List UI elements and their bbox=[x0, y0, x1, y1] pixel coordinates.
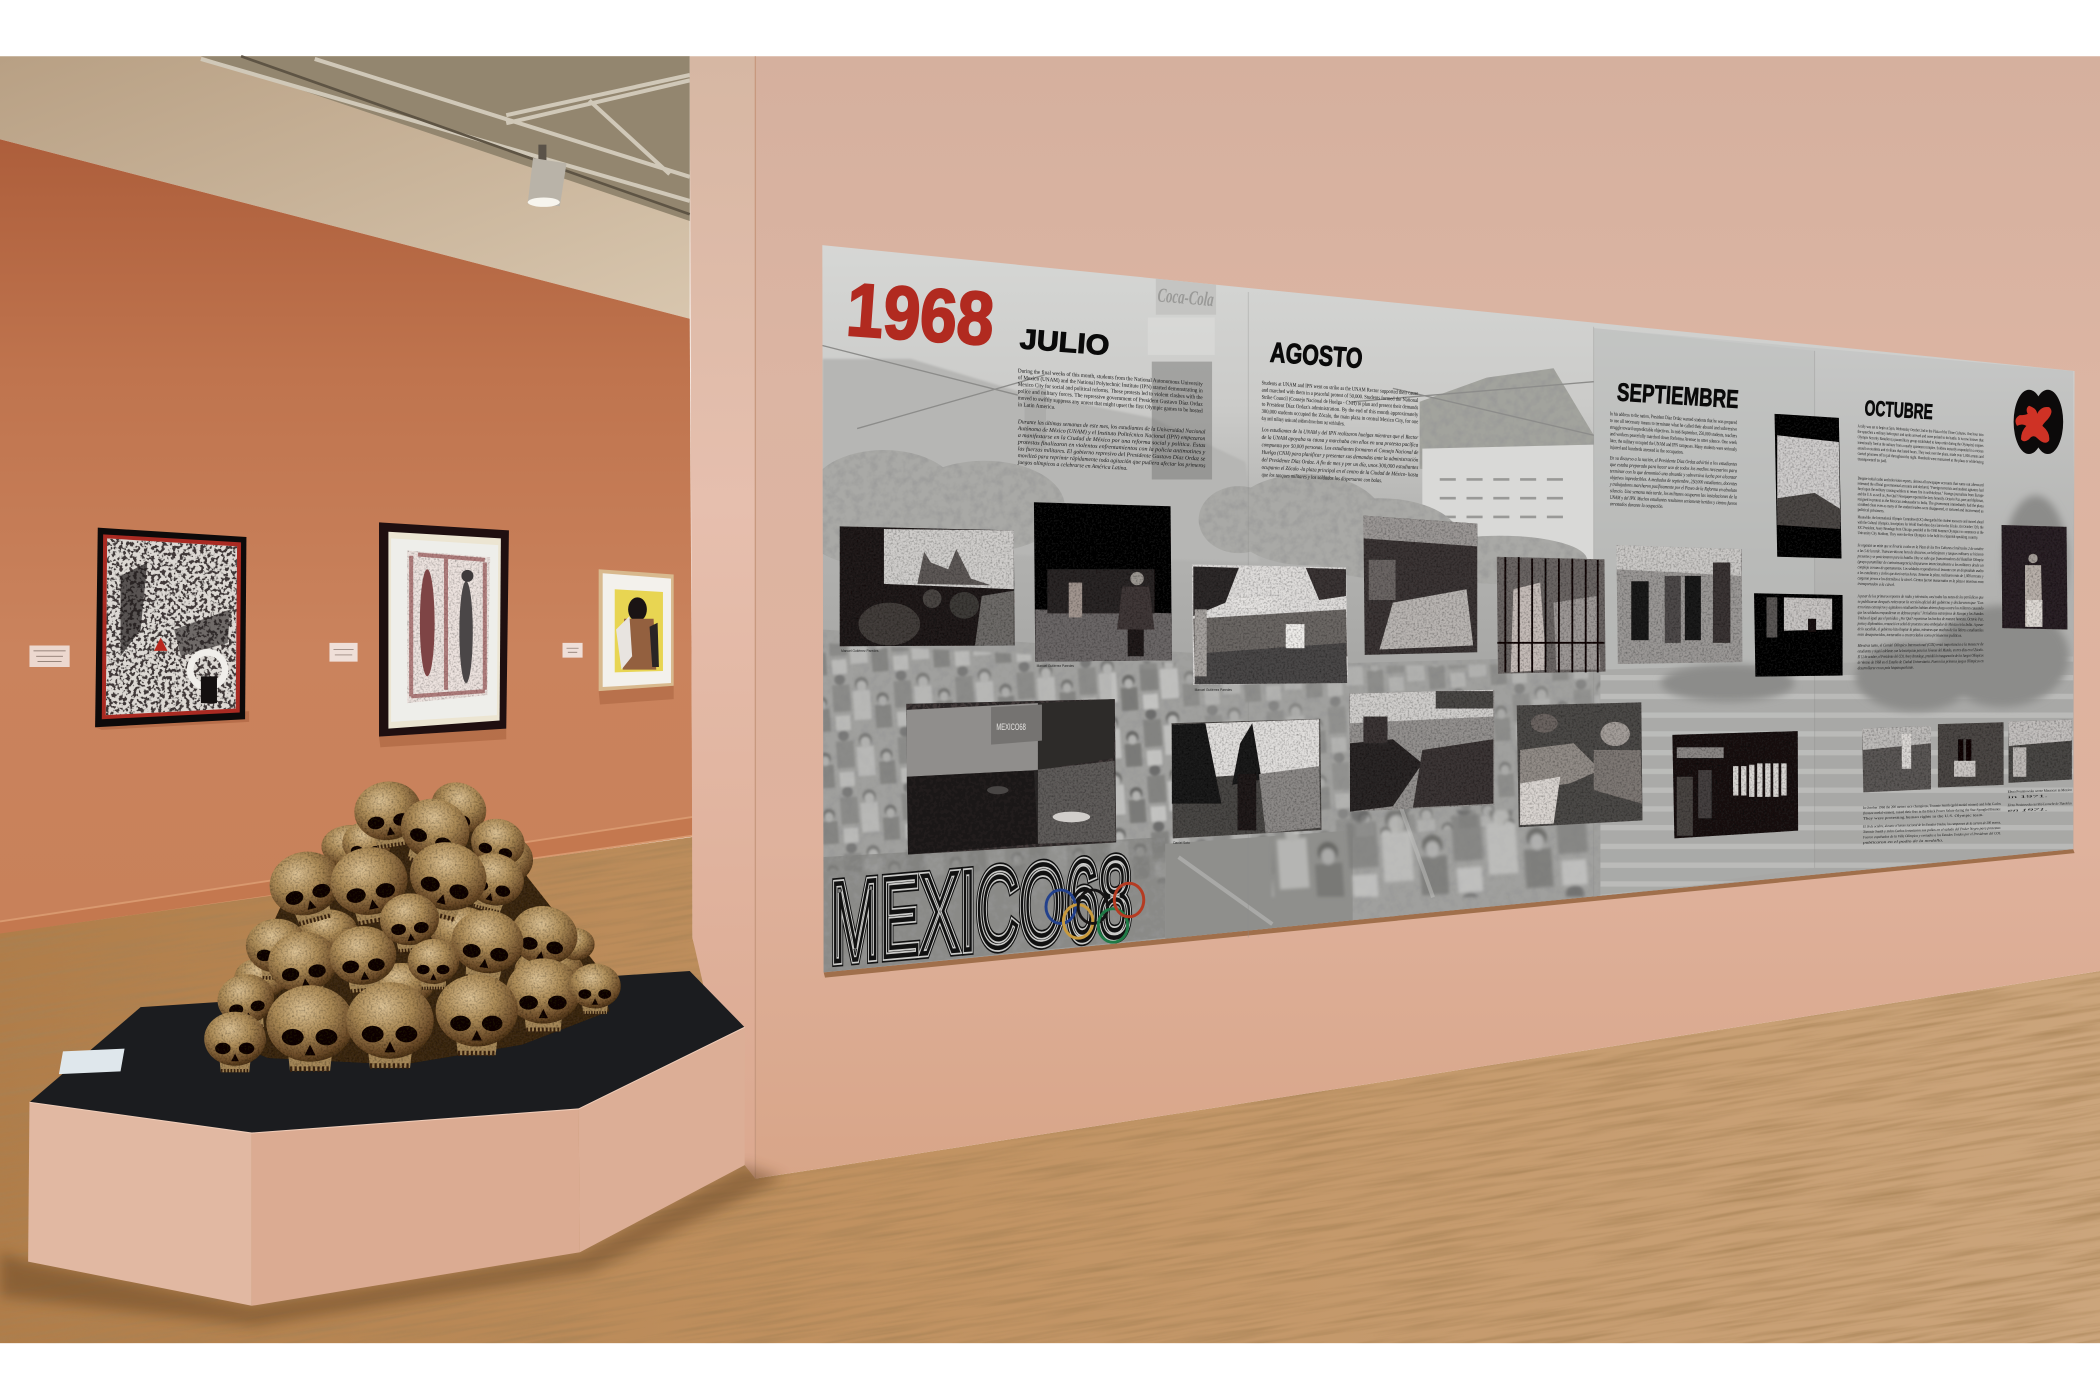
photo: flooded plaza bbox=[1171, 719, 1321, 838]
photo: group portrait bbox=[2009, 720, 2072, 783]
text block: September Spanish: UNAM y del IPN. Muchos estudiantes resultaron seriamente heridos y cientos fueron bbox=[1610, 494, 1737, 507]
text block: October Spanish rally: complejo cercano de apartamentos. Los soldados respondieron al instante con un despiadado asalto bbox=[1858, 564, 1983, 573]
skull pile sculpture bbox=[204, 772, 621, 1072]
heading: Octubre: OCTUBRE bbox=[1864, 396, 1934, 424]
photo: student march with signs bbox=[1192, 565, 1348, 685]
text block: August Spanish: Huelga (CNH) para planificar y presentar sus demandas ante la administración bbox=[1261, 449, 1418, 464]
photo captions: Manuel Gutiérrez Paredes bbox=[1195, 688, 1232, 692]
text block: October Spanish press: terroristas extranjeros y agitadores estudiantiles habían abierto fuego contra los militares causando bbox=[1858, 604, 1983, 611]
text block: August English: to President Díaz Ordaz's administration. By the end of this month approximately bbox=[1262, 401, 1418, 418]
photo captions: Manuel Gutiérrez Paredes bbox=[841, 649, 879, 653]
panel background bbox=[822, 245, 2075, 972]
text block: October English: A rally was set to begin at 5pm, Wednesday October 2nd in the Plaza of the Three Cultures. One hour into bbox=[1858, 423, 1983, 438]
text block: October Spanish Olympic committee: desarrollarse en un país hispanoparlante. bbox=[1858, 665, 1914, 670]
octagonal pedestal bbox=[28, 971, 745, 1306]
text block: October Olympic committee: University City Stadium. They were the first Olympics to be held in a Spanish speaking country. bbox=[1858, 530, 1978, 540]
photo: tank in Zocalo bbox=[1349, 690, 1494, 812]
text block: July Spanish: movilizó para reprimir rápidamente toda agitación que pudiera afectar los primeros bbox=[1018, 452, 1206, 469]
text block: October Spanish press: A pesar de los primeros reportes de radio y televisión, casi todas las notas de los periódicos que bbox=[1857, 593, 1984, 601]
track light fixture bbox=[528, 145, 567, 207]
text block: September English: struggle toward unpredictable objectives. In mid-September, 250,000 students, teachers bbox=[1610, 425, 1737, 439]
heading: Agosto: AGOSTO bbox=[1269, 337, 1364, 374]
bottom white band bbox=[0, 1343, 2100, 1400]
timeline panel bbox=[810, 245, 2075, 978]
text block: September English: In his address to the nation, President Díaz Ordaz warned students that he was prepared bbox=[1610, 411, 1737, 426]
text block: September English: later, the military occupied the UNAM and IPN campuses. Many students were seriously bbox=[1610, 438, 1737, 453]
back gallery wall bbox=[0, 139, 692, 921]
photo captions: Manuel Gutiérrez Paredes bbox=[1037, 664, 1074, 668]
pedestal label bbox=[59, 1049, 125, 1074]
ghost collage bbox=[810, 275, 2073, 972]
text block: Olympic caption right bbox=[2007, 788, 2072, 813]
panel seams bbox=[1248, 292, 1815, 938]
text block: October English bbox=[1858, 423, 1984, 470]
text block: October English: assault on students and civilians that lasted hours. They took over the plaza, made over 1,000 arrests and bbox=[1858, 445, 1984, 460]
text block: September Spanish: terminar con lo que denominó una absurda y subversiva lucha por alcanzar bbox=[1610, 469, 1738, 481]
text block: October Olympic committee: with the Cultural Olympics, Inscriptions for World Youth three days later in the Zócalo. On October 12th, the bbox=[1858, 520, 1984, 531]
photo: black power salute bbox=[1938, 722, 2004, 788]
text block: July English: moved to swiftly suppress any unrest that might upset the first Olympic games to be hosted bbox=[1018, 394, 1203, 415]
text block: October Spanish Olympic committee: estudiantes y siguió adelante con la Inscripción para los Jóvenes del Mundo, en tres días en el Zócalo. bbox=[1858, 647, 1983, 655]
icon: red and black 1968 emblem bbox=[2014, 390, 2063, 454]
photo: soldiers clashing bbox=[1517, 702, 1642, 827]
wall corner bbox=[754, 56, 756, 1179]
text block: Olympic caption right: Elena Poniatowska wrote Massacre in Mexico bbox=[2008, 788, 2072, 794]
text block: October English: transported to jail. bbox=[1858, 456, 1887, 463]
ghost sign text: Coca-Cola bbox=[1157, 284, 1215, 311]
text block: October Spanish Olympic committee bbox=[1857, 641, 1984, 670]
text block: August English bbox=[1262, 380, 1419, 433]
artwork: portrait on yellow bbox=[599, 569, 674, 704]
artwork: black and white print with red border bbox=[95, 528, 249, 730]
text block: August Spanish: Los estudiantes de la UNAM y del IPN realizaron huelgas mientras que el Rector bbox=[1261, 427, 1419, 441]
text block: July Spanish: Durante las últimas semanas de este mes, los estudiantes de la Universidad Nacional bbox=[1017, 419, 1206, 436]
photo: figure at dark window bbox=[1754, 593, 1843, 677]
text block: October press: scrubbed clean even as many of the student leaders were disappeared, or tortured and incarcerated as bbox=[1858, 502, 1984, 515]
text block: July English: During the final weeks of this month, students from the National Autonomous University bbox=[1018, 367, 1203, 388]
text block: August English: Strike Council (Consejo Nacional de Huelga - CNH) to plan and present their demands bbox=[1262, 394, 1418, 411]
text block: Olympic caption bbox=[1861, 802, 2001, 845]
text block: October Spanish rally: Se organizó un mitin que se llevaría a cabo en la Plaza de las Tres Culturas el miércoles 2 de octubre bbox=[1858, 542, 1984, 551]
text block: October press: Despite initial radio and television reports, almost all newspaper accounts that came out afterward bbox=[1858, 475, 1984, 488]
text block: Olympic caption: Fueron expulsados de la Villa Olímpica y enviados a los Estados Unidos por el Presidente del COI. bbox=[1862, 831, 2001, 839]
logo: Mexico 68 with Olympic rings bbox=[830, 833, 1144, 986]
heading: Julio: JULIO bbox=[1019, 323, 1111, 361]
photo: massive crowd with Mexico 68 building bbox=[906, 699, 1116, 854]
text block: Olympic caption right: en 1971. bbox=[2008, 807, 2048, 813]
text block: September English bbox=[1610, 411, 1738, 460]
olympic rings bbox=[1046, 883, 1144, 942]
wooden floor bbox=[0, 837, 2100, 1343]
ghost steps bbox=[1600, 656, 2073, 895]
text block: September English: injured and hundreds arrested in the occupation. bbox=[1610, 445, 1683, 456]
text block: August English: 300,000 students occupied the Zócalo, the main plaza in central Mexico City, for one bbox=[1262, 408, 1419, 425]
text block: October Spanish press: poeta y diplomático, renunció en señal de protesta como embajador de México en la India. A pesar bbox=[1857, 621, 1984, 628]
text block: September English: to use all necessary means to terminate what he called their absurd and subversive bbox=[1610, 418, 1738, 433]
text block: October press: and the U.S. as well as ¿Por Qué? Newspaper reported the facts honestly. Octavio Paz, poet and diplomat, bbox=[1858, 491, 1983, 504]
text block: October Spanish rally: a los estudiantes y civiles que duró varias horas. Tomaron la plaza, realizaron más de 1,000 arrestos y bbox=[1858, 570, 1984, 580]
photo: shirtless prisoner bbox=[2002, 525, 2067, 629]
year heading 1968: 1968 bbox=[844, 267, 997, 361]
text block: September Spanish: y trabajadores marcharon pacíficamente por el Paseo de la Reforma en absoluto bbox=[1609, 481, 1737, 494]
heading: Septiembre: SEPTIEMBRE bbox=[1616, 378, 1740, 414]
photo captions: Daniel Soto bbox=[1173, 841, 1190, 845]
text block: October Olympic committee bbox=[1858, 514, 1984, 540]
text block: September Spanish: que estaba preparado para hacer uso de todos los medios necesarios para bbox=[1610, 462, 1737, 474]
artwork: framed red and grey print bbox=[379, 522, 509, 747]
text block: Olympic caption right: Elena Poniatowska escribió La noche de Tlatelolco bbox=[2007, 801, 2072, 807]
photo: massive crowd with Mexico 68 building: MEXICO68 bbox=[996, 722, 1026, 732]
text block: October press: political prisoners. bbox=[1858, 507, 1884, 513]
partition wall front bbox=[755, 56, 2100, 1179]
text block: October Spanish rally: cargaron presos a los detenidos a la cárcel. Cientos fueron masacrados en la plaza o mientras eran bbox=[1858, 575, 1983, 584]
text block: August Spanish: ocuparon el Zócalo -la plaza principal en el centro de la Ciudad de México- hasta bbox=[1262, 465, 1418, 479]
panel shadow bbox=[824, 849, 2075, 978]
photo: prisoners behind bars bbox=[1497, 557, 1606, 674]
text block: August Spanish bbox=[1261, 427, 1419, 486]
text block: September Spanish: arrestados durante la ocupación. bbox=[1610, 501, 1663, 510]
text block: August Spanish: del Presidente Díaz Ordaz. A fin de mes y por un día, unos 300,000 estudiantes bbox=[1262, 456, 1419, 471]
logo: Mexico 68 with Olympic rings: MEXICO68 bbox=[830, 833, 1132, 986]
photo: broken window over city bbox=[1775, 414, 1842, 558]
text block: Olympic caption: El 16 de octubre, durante el himno nacional de los Estados Unidos, los campeones de la carrera de 200 metros, bbox=[1862, 821, 2001, 830]
text block: October Spanish Olympic committee: El 12 de octubre, el Presidente del COI, Avery Brundage, presidió la inauguración de los Juegos Olímpicos bbox=[1857, 653, 1984, 660]
text block: October Spanish press: Unidos al igual que el periódico ¿Por Qué? reportaron los hechos de manera honesta. Octavio Paz, bbox=[1858, 615, 1983, 623]
text block: October press: resigned in protest as the Mexican ambassador to India. The government immediately had the plaza bbox=[1858, 496, 1984, 508]
text block: September Spanish bbox=[1609, 455, 1738, 514]
text block: July English bbox=[1018, 367, 1203, 421]
text block: October English: the speeches a military helicopter and tanks arrived and were poised to do battle. It is now known that bbox=[1858, 429, 1984, 443]
text block: October Spanish press: de lo sucedido, el gobierno hizo limpiar la plaza, mientras que muchos de los líderes estudiantiles bbox=[1858, 626, 1984, 634]
text block: July English: in Latin America. bbox=[1018, 402, 1056, 411]
photo: night protest arrests bbox=[1034, 502, 1172, 662]
text block: July Spanish: protestas finalizaron en violentos enfrentamientos con la policía antimotines y bbox=[1017, 438, 1206, 456]
text block: August Spanish: de la UNAM apoyaba su causa y marchaba con ellos en una protesta pacífica bbox=[1262, 434, 1418, 449]
ceiling and trusses bbox=[0, 56, 690, 319]
photo: overturned furniture bbox=[1363, 516, 1477, 655]
partition wall side bbox=[690, 56, 755, 1179]
photo: Zocalo crowd and helmets bbox=[840, 526, 1015, 646]
text block: September English: and workers peacefully marched down Reforma Avenue in utter silence. One week bbox=[1610, 430, 1737, 446]
photo: soldiers leading prisoners bbox=[1616, 545, 1742, 664]
text block: October press: fired upon the military causing soldiers to return fire in self-defense." Foreign journalists from Europe bbox=[1858, 486, 1984, 498]
logo: Mexico 68 with Olympic rings: MEXICO68 bbox=[830, 833, 1132, 986]
text block: October Spanish press bbox=[1857, 593, 1984, 639]
text block: Olympic caption: In October 1968 the 200 meters race champions, Tommie Smith (gold medal winner) and John Carlos bbox=[1863, 802, 2001, 811]
text block: October press bbox=[1858, 475, 1984, 519]
text block: October Olympic committee: IOC President, Avery Brundage from Chicago, presided at the 1968 Summer Olympics to commence at the bbox=[1858, 525, 1984, 536]
text block: October Spanish rally: transportados a la cárcel. bbox=[1858, 581, 1895, 587]
text block: August English: day until military tanks and soldiers drove them out with bullets. bbox=[1262, 416, 1345, 428]
text block: October Spanish rally bbox=[1857, 542, 1984, 590]
ghost crowd bbox=[822, 629, 1600, 972]
text block: October English: intentionally fired at the military from a nearby apartment complex. Soldiers instantly responded in a vicious bbox=[1858, 440, 1984, 454]
ghost trees bbox=[810, 450, 1587, 584]
wall baseboard bbox=[0, 817, 692, 935]
text block: September Spanish: En su discurso a la nación, el Presidente Díaz Ordaz advirtió a los estudiantes bbox=[1609, 455, 1737, 468]
text block: Olympic caption: Tommie Smith y John Carlos levantaron sus puños en el saludo del Poder Negro para protestar. bbox=[1863, 826, 2001, 834]
text block: October Spanish rally: presentes y se posicionaron para la batalla. Hoy se sabe que francotiradores del Batallón Olimpia bbox=[1857, 553, 1983, 562]
photo captions bbox=[841, 649, 1232, 845]
text block: July Spanish: juegos olímpicos a celebrarse en América Latina. bbox=[1017, 460, 1128, 472]
text block: Olympic caption right: in 1971. bbox=[2008, 794, 2048, 799]
photo: detainees along wall bbox=[1672, 731, 1798, 838]
text block: July English: Mexico City for social and political reforms. These protests led to violent clashes with the bbox=[1018, 381, 1203, 401]
text block: October Olympic committee: Meanwhile, the International Olympic Committee (IOC) disregarded the student massacre and moved ahead bbox=[1858, 514, 1984, 525]
text block: October Spanish Olympic committee: de Verano de 1968 en el Estadio de Ciudad Universitaria. Fueron los primeros juegos Olímpicos en bbox=[1858, 658, 1983, 665]
text block: October Spanish press: que los soldados respondieran en defensa propia." Periodistas extranjeros de Europa y los Estados bbox=[1858, 610, 1984, 616]
text block: Olympic caption: publicaron en el podio de la medalla. bbox=[1861, 838, 1943, 845]
text block: July English: police and military forces. The repressive government of President Gustavo Díaz Ordaz bbox=[1018, 388, 1203, 408]
text block: July Spanish: las fuerzas militares. El gobierno represivo del Presidente Gustavo Díaz Ordaz se bbox=[1018, 445, 1206, 463]
text block: October English: carried prisoners off to jail throughout the night. Hundreds were massacred at the plaza or while being bbox=[1858, 451, 1984, 465]
text block: Olympic caption: They were protesting human rights in the U.S. Olympic team. bbox=[1863, 813, 1984, 821]
text block: October press: reiterated the official governmental accounts and declared, "Foreign terrorists and student agitators had bbox=[1858, 481, 1984, 494]
text block: October Spanish rally: a las 5 de la tarde. Transcurrida una hora de discursos, un helicóptero y tanques militares se hicieron bbox=[1858, 548, 1983, 558]
text block: July English: of Mexico (UNAM) and the National Polytechnic Institute (IPN) started demonstrating in bbox=[1018, 374, 1203, 394]
pedestal floor shadow bbox=[0, 1165, 783, 1326]
text block: August Spanish: compuesta por 50,000 personas. Los estudiantes formaron el Consejo Nacional de bbox=[1262, 441, 1419, 456]
text block: August English: Students at UNAM and IPN went on strike as the UNAM Rector supported their cause bbox=[1262, 380, 1419, 397]
text block: October English: Olympic Security Battalion (a paramilitary group established to keep order during the Olympics) snipers bbox=[1858, 434, 1984, 448]
text block: July Spanish: Autónoma de México (UNAM) y el Instituto Politécnico Nacional (IPN) empezaron bbox=[1017, 425, 1205, 442]
text block: July Spanish bbox=[1017, 419, 1206, 476]
text block: August English: and marched with them in a peaceful protest of 50,000. Students formed the National bbox=[1262, 386, 1419, 404]
text block: October Spanish rally: (grupo paramilitar de contrainsurgencia) dispararon intencionalmente a los militares desde un bbox=[1858, 559, 1983, 568]
text block: Olympic caption: (bronze medal winner), raised their fists in the Black Power Salute during the Star-Spangled Banner. bbox=[1863, 807, 2001, 816]
text block: October Spanish press: se publicaron después reiteraron la versión oficial del gobierno y declararon que "Los bbox=[1858, 599, 1984, 605]
text block: August Spanish: que los tanques militares y los soldados los dispersaron con balas. bbox=[1262, 472, 1382, 484]
logo: Mexico 68 with Olympic rings: MEXICO68 bbox=[830, 833, 1132, 986]
text block: October Spanish Olympic committee: Mientras tanto, el Comité Olímpico Internacional (COI) restó importancia a la masacre de bbox=[1857, 641, 1984, 649]
wall labels bbox=[29, 643, 583, 667]
text block: September Spanish: silencio. Una semana más tarde, los militares ocuparon las instalaciones de la bbox=[1610, 488, 1737, 501]
text block: September Spanish: objetivos impredecibles. A mediados de septiembre, 250,000 estudiantes, docentes bbox=[1610, 475, 1737, 487]
text block: October Spanish press: eran desaparecidos, torturados o encarcelados como prisioneros políticos. bbox=[1858, 632, 1962, 639]
photo: athlete with torch bbox=[1862, 726, 1931, 792]
text block: July Spanish: a manifestarse en la Ciudad de México por una reforma social y política. Estas bbox=[1018, 432, 1206, 449]
